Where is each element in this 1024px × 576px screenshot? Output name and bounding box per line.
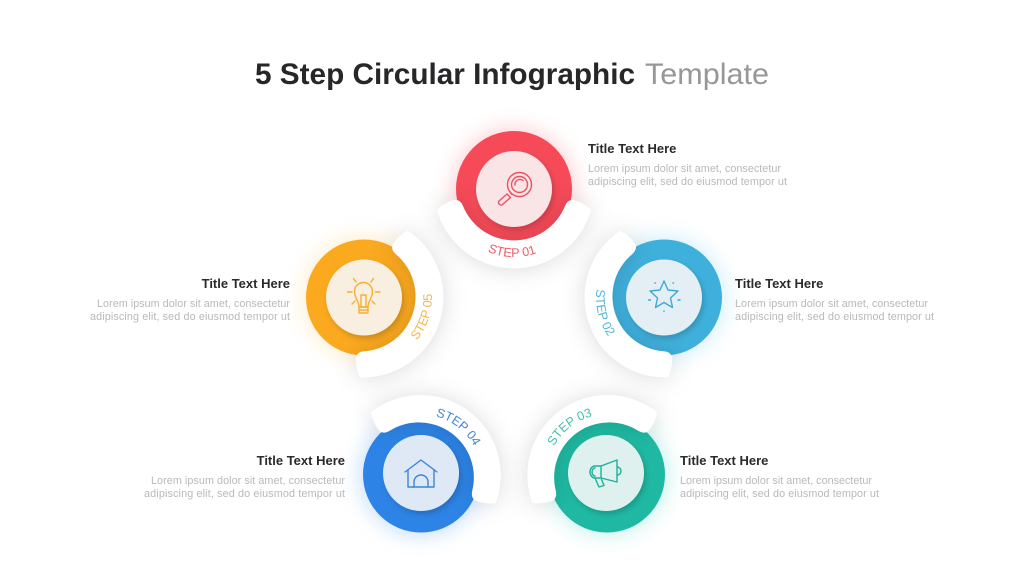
text: step 02 description: adipiscing elit, sed do eiusmod tempor ut bbox=[735, 311, 934, 323]
icon: light bulb bbox=[348, 278, 380, 313]
text: step 05 description bbox=[90, 276, 290, 323]
text: step 01 description: Lorem ipsum dolor sit amet, consectetur bbox=[588, 163, 781, 175]
text: step 05 description: Lorem ipsum dolor sit amet, consectetur bbox=[97, 298, 290, 310]
text: step 01 description: adipiscing elit, sed do eiusmod tempor ut bbox=[588, 176, 787, 188]
icon: megaphone bbox=[590, 460, 621, 487]
icon: house bbox=[405, 460, 437, 487]
text: step 04 description: Lorem ipsum dolor sit amet, consectetur bbox=[151, 475, 345, 487]
step 05: orange circle bbox=[294, 228, 451, 384]
text: step 04 description: adipiscing elit, sed do eiusmod tempor ut bbox=[144, 488, 345, 500]
step 02: sky blue circle bbox=[577, 228, 734, 384]
text: step 05 description: Title Text Here bbox=[202, 276, 290, 291]
step 05: orange circle: STEP 05 bbox=[411, 294, 432, 339]
step 03: teal circle bbox=[520, 388, 678, 546]
text: step 05 description: adipiscing elit, sed do eiusmod tempor ut bbox=[90, 311, 290, 323]
text: step 01 description bbox=[588, 141, 787, 188]
text: step 03 description bbox=[680, 453, 879, 500]
text: step 02 description: Lorem ipsum dolor sit amet, consectetur bbox=[735, 298, 928, 310]
icon: star bbox=[648, 281, 680, 312]
step 01: red circle: STEP 01 bbox=[488, 244, 536, 258]
title: 5 Step Circular Infographic bbox=[255, 58, 635, 91]
text: step 01 description: Title Text Here bbox=[588, 141, 676, 156]
step 01: red circle bbox=[434, 120, 594, 277]
text: step 04 description: Title Text Here bbox=[257, 453, 345, 468]
text: step 03 description: adipiscing elit, sed do eiusmod tempor ut bbox=[680, 488, 879, 500]
step 02: sky blue circle: STEP 02 bbox=[596, 290, 614, 336]
text: step 02 description bbox=[735, 276, 934, 323]
icon: magnifier bbox=[498, 172, 532, 205]
text: step 03 description: Title Text Here bbox=[680, 453, 768, 468]
text: step 04 description bbox=[144, 453, 345, 500]
text: step 02 description: Title Text Here bbox=[735, 276, 823, 291]
step 04: blue circle: STEP 04 bbox=[436, 408, 480, 445]
title: Template bbox=[645, 58, 769, 91]
step 03: teal circle: STEP 03 bbox=[548, 408, 592, 445]
step 04: blue circle bbox=[350, 388, 508, 546]
text: step 03 description: Lorem ipsum dolor sit amet, consectetur bbox=[680, 475, 872, 487]
